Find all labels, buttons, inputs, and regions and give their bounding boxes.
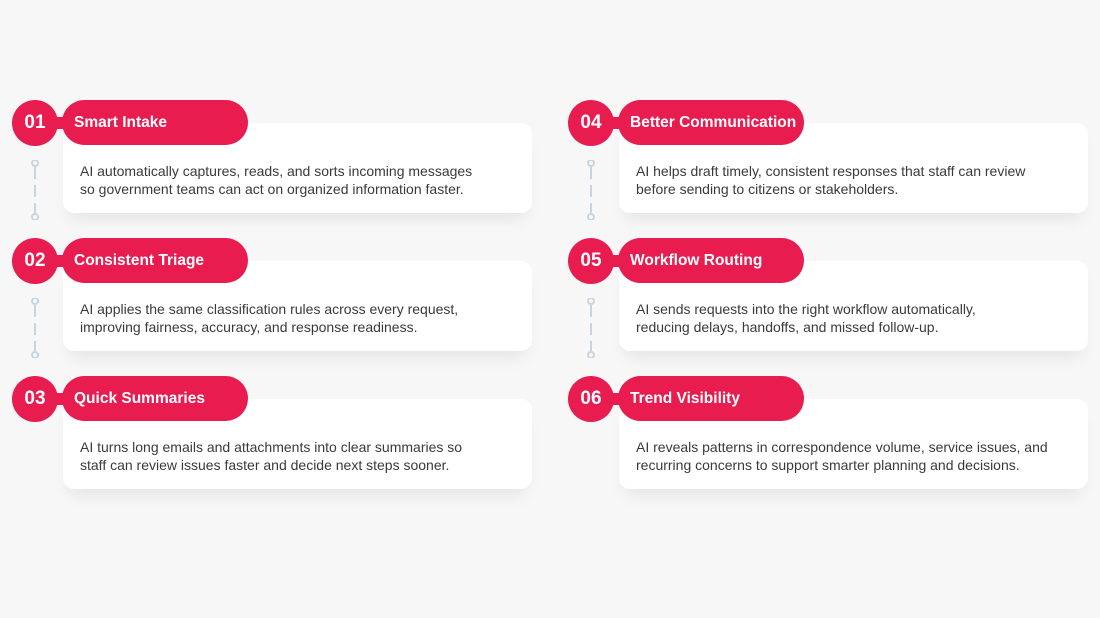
- card 05: [619, 261, 1088, 351]
- card 04: before sending to citizens or stakeholders.: [636, 181, 898, 197]
- connector: [31, 298, 39, 358]
- item 05: [568, 238, 1080, 358]
- pill: Quick Summaries: [62, 376, 248, 421]
- card 04: [619, 123, 1088, 213]
- number 05: [568, 238, 614, 284]
- item 06: [568, 376, 1080, 496]
- card 06: [619, 399, 1088, 489]
- card 02: improving fairness, accuracy, and response readiness.: [80, 319, 417, 335]
- card 04: AI helps draft timely, consistent responses that staff can review: [636, 163, 1025, 179]
- card 02: AI applies the same classification rules across every request,: [80, 301, 458, 317]
- card 01: so government teams can act on organized information faster.: [80, 181, 464, 197]
- pill: Workflow Routing: [618, 238, 804, 283]
- pill: Better Communication: [618, 100, 804, 145]
- pill: Better Communication: Better Communication: [630, 114, 796, 131]
- number 01: [12, 100, 58, 146]
- card 01: [63, 123, 532, 213]
- number 01: 01: [24, 112, 46, 133]
- number 06: [568, 376, 614, 422]
- card 05: reducing delays, handoffs, and missed follow-up.: [636, 319, 938, 335]
- item 04: [568, 100, 1080, 220]
- card 06: AI reveals patterns in correspondence volume, service issues, and: [636, 439, 1048, 455]
- card 02: [63, 261, 532, 351]
- number 06: 06: [580, 388, 602, 409]
- pill: Smart Intake: Smart Intake: [74, 114, 167, 131]
- pill: Trend Visibility: Trend Visibility: [630, 390, 740, 407]
- card 05: AI sends requests into the right workflow automatically,: [636, 301, 976, 317]
- card 06: recurring concerns to support smarter planning and decisions.: [636, 457, 1020, 473]
- item 03: [12, 376, 524, 496]
- pill: Workflow Routing: Workflow Routing: [630, 252, 762, 269]
- pill: Consistent Triage: [62, 238, 248, 283]
- pill: Consistent Triage: Consistent Triage: [74, 252, 204, 269]
- connector: [587, 160, 595, 220]
- number 02: [12, 238, 58, 284]
- item 01: [12, 100, 524, 220]
- number 04: 04: [580, 112, 602, 133]
- card 01: AI automatically captures, reads, and sorts incoming messages: [80, 163, 472, 179]
- pill: Trend Visibility: [618, 376, 804, 421]
- pill: Smart Intake: [62, 100, 248, 145]
- card 03: [63, 399, 532, 489]
- card 03: staff can review issues faster and decide next steps sooner.: [80, 457, 449, 473]
- number 04: [568, 100, 614, 146]
- number 05: 05: [580, 250, 602, 271]
- card 03: AI turns long emails and attachments into clear summaries so: [80, 439, 462, 455]
- number 03: 03: [24, 388, 46, 409]
- item 02: [12, 238, 524, 358]
- connector: [31, 160, 39, 220]
- pill: Quick Summaries: Quick Summaries: [74, 390, 205, 407]
- number 03: [12, 376, 58, 422]
- connector: [587, 298, 595, 358]
- number 02: 02: [24, 250, 46, 271]
